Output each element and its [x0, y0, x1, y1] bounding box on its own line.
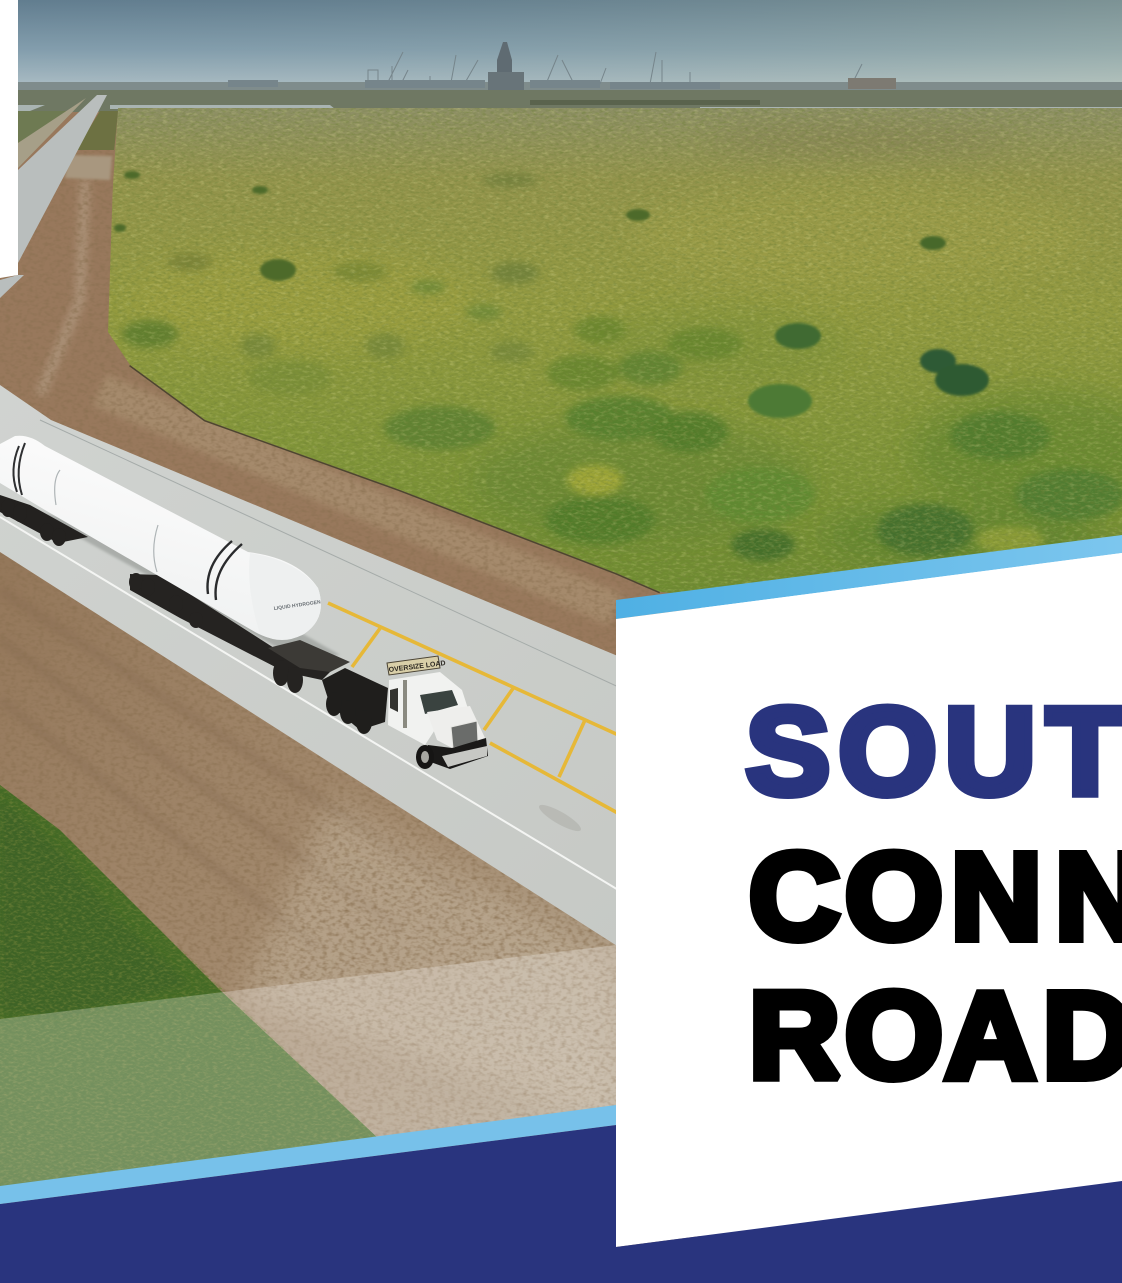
tractor rear axles and frame — [322, 668, 388, 734]
far flats and water — [18, 90, 1122, 143]
cylindrical tank — [0, 436, 321, 640]
top-left white page edge — [0, 0, 18, 278]
photo base — [0, 0, 700, 1283]
concrete highway — [0, 385, 625, 951]
truck cab — [388, 672, 488, 769]
far concrete road — [18, 95, 107, 263]
title line 1: SOUT — [746, 684, 1122, 821]
large soft shrubs — [122, 173, 1122, 561]
sky — [0, 0, 1122, 90]
lower-left grass — [0, 785, 380, 1190]
distant port skyline — [18, 42, 1122, 91]
lower dirt shoulder — [0, 552, 630, 1152]
oversize load sign: OVERSIZE LOAD — [388, 660, 446, 674]
oversize load truck — [0, 436, 488, 769]
yellow road markings — [328, 603, 625, 817]
upper light blue stripe — [616, 535, 1122, 619]
road edge line — [0, 517, 625, 894]
translucent photo overlay — [0, 944, 625, 1190]
far sandy shoulder — [18, 98, 86, 168]
tank shadow on road — [30, 510, 340, 660]
field colour patches — [226, 134, 1122, 562]
navy footer wedge — [616, 1181, 1122, 1283]
lower light blue stripe — [0, 1105, 616, 1204]
upper dirt road — [3, 150, 660, 641]
rear dolly — [0, 495, 88, 546]
verge beside far road — [76, 111, 118, 152]
dark distinct shrubs — [114, 171, 989, 418]
title — [746, 684, 1122, 1105]
cylindrical tank: LIQUID HYDROGEN — [273, 599, 321, 612]
trailer deck and wheels — [129, 573, 350, 693]
grass field — [100, 108, 1122, 608]
white title panel — [616, 553, 1122, 1247]
lower navy band — [0, 1125, 616, 1283]
